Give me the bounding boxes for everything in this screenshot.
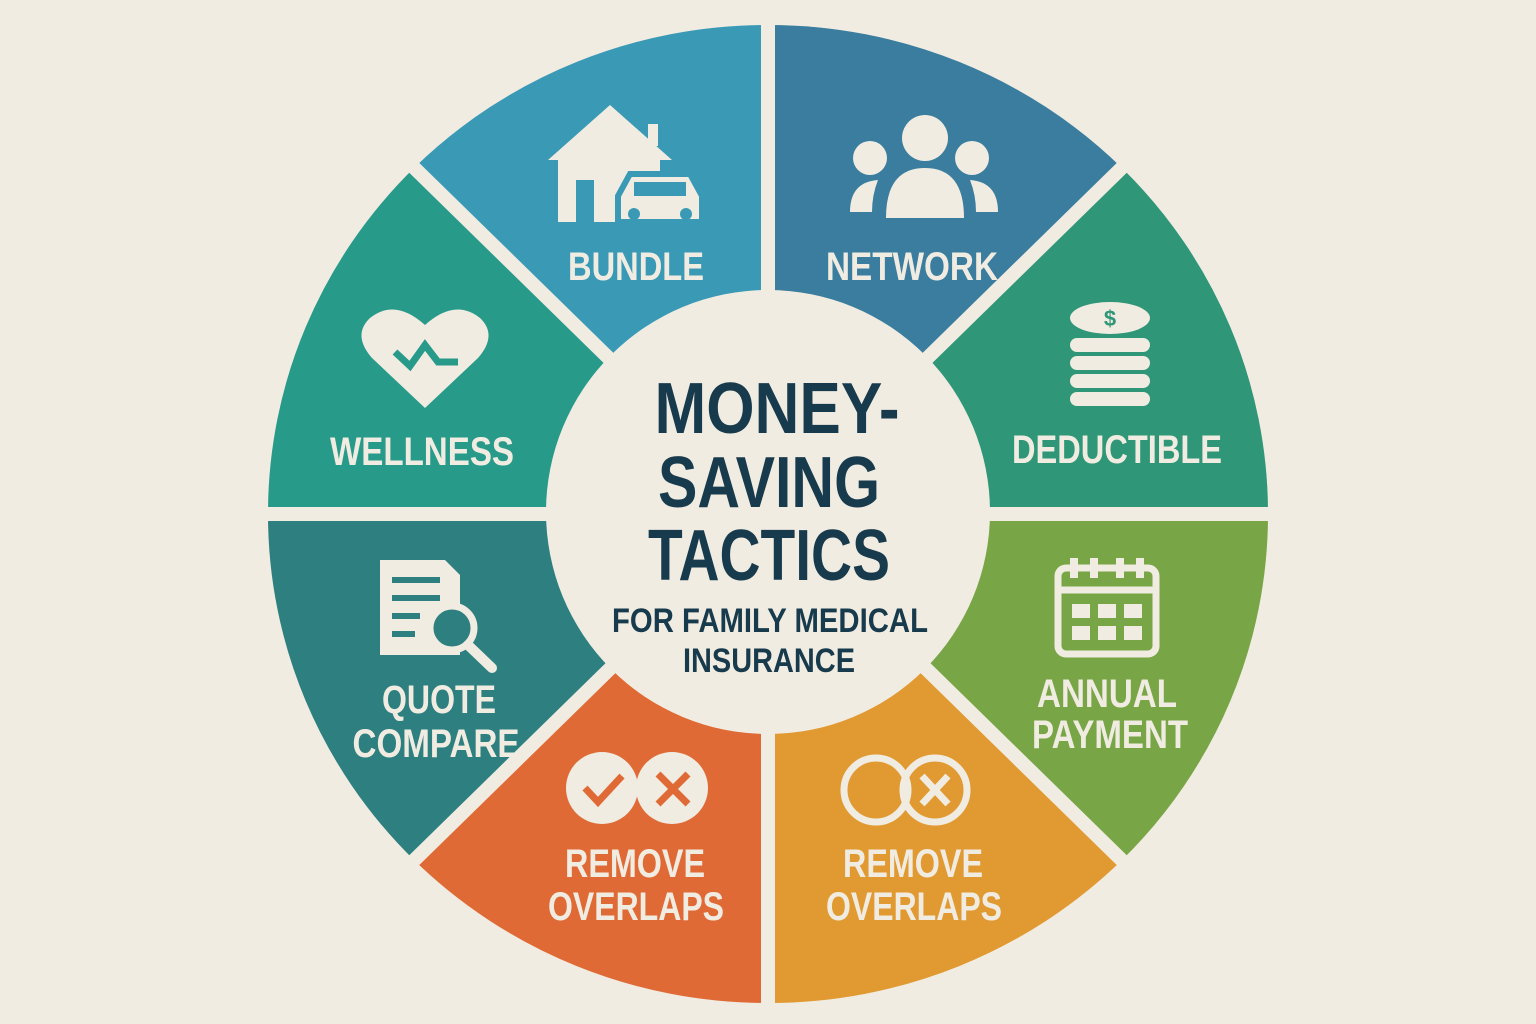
- labels: [330, 245, 1222, 929]
- icon: overlapping circles outline: [844, 758, 967, 822]
- labels: PAYMENT: [1032, 713, 1188, 757]
- segment: deductible: [768, 168, 1268, 514]
- wheel: [250, 0, 1290, 1024]
- labels: QUOTE: [382, 678, 496, 722]
- labels: BUNDLE: [568, 245, 704, 289]
- center title: SAVING: [658, 443, 880, 523]
- center title: INSURANCE: [683, 642, 855, 680]
- segment: wellness: [268, 168, 768, 514]
- icon: calendar: [1058, 558, 1156, 654]
- icon: check and x circles: [566, 752, 708, 824]
- icon: people: [850, 115, 998, 218]
- labels: OVERLAPS: [548, 885, 724, 929]
- segment: bundle: [414, 25, 768, 514]
- segment: network: [768, 25, 1122, 514]
- labels: DEDUCTIBLE: [1012, 428, 1222, 472]
- center title: [612, 369, 928, 680]
- labels: WELLNESS: [330, 430, 514, 474]
- segment: annual payment: [768, 514, 1268, 860]
- labels: REMOVE: [565, 842, 705, 886]
- icon: coin stack: $: [1104, 306, 1116, 331]
- center title: TACTICS: [648, 516, 890, 596]
- icon: coin stack: [1070, 302, 1150, 406]
- icon: house and car: [548, 105, 702, 222]
- icon: heart with pulse: [361, 309, 489, 408]
- labels: NETWORK: [826, 245, 998, 289]
- segment: remove overlaps left: [414, 514, 768, 1003]
- center title: MONEY-: [654, 369, 900, 449]
- labels: REMOVE: [843, 842, 983, 886]
- center title: FOR FAMILY MEDICAL: [612, 602, 928, 640]
- labels: OVERLAPS: [826, 885, 1002, 929]
- segment: quote compare: [268, 514, 768, 860]
- icon: document with magnifier: [380, 560, 492, 668]
- segment: remove overlaps right: [768, 514, 1122, 1003]
- labels: COMPARE: [352, 722, 520, 766]
- labels: ANNUAL: [1037, 672, 1177, 716]
